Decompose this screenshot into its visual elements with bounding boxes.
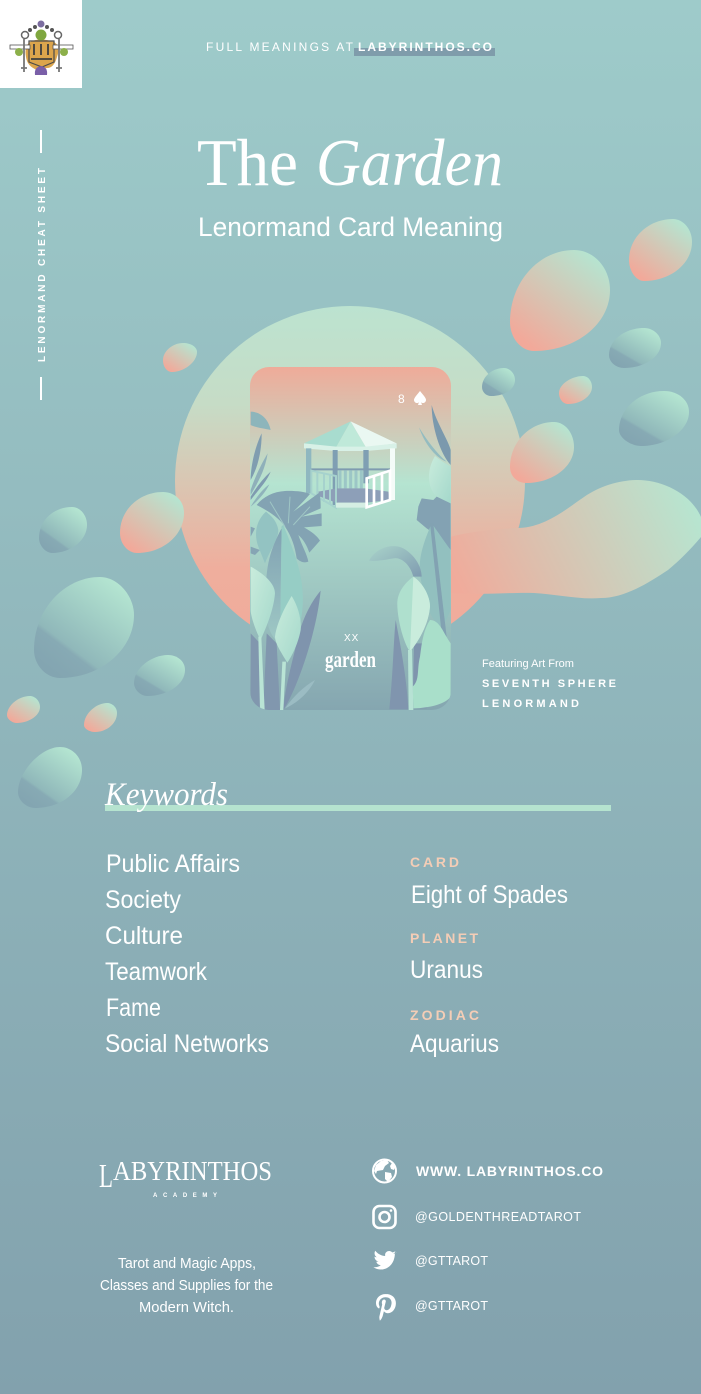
card name: garden <box>325 647 376 672</box>
title: Garden <box>316 126 503 200</box>
twitter handle: @GTTAROT <box>415 1254 488 1268</box>
card attributes: Aquarius <box>410 1030 499 1058</box>
icon: spade <box>414 391 426 405</box>
footer tagline: Tarot and Magic Apps, <box>118 1256 256 1272</box>
art credit: LENORMAND <box>482 698 579 710</box>
icon: foliage right <box>369 405 451 710</box>
top link: FULL MEANINGS AT <box>206 40 354 54</box>
keywords heading: Keywords <box>104 777 228 813</box>
floating blobs <box>7 219 692 808</box>
website: WWW. LABYRINTHOS.CO <box>416 1163 603 1179</box>
keyword list: Culture <box>105 922 183 950</box>
footer tagline: Classes and Supplies for the <box>100 1278 273 1294</box>
keyword list: Fame <box>106 994 161 1022</box>
card number: 8 <box>398 392 405 406</box>
vertical side label: LENORMAND CHEAT SHEET <box>37 168 48 362</box>
title: The <box>197 126 298 200</box>
footer tagline <box>100 1256 273 1316</box>
card attributes: PLANET <box>410 930 478 946</box>
footer logo: ABYRINTHOS <box>113 1156 272 1186</box>
card attributes: CARD <box>410 854 459 870</box>
card attributes: Eight of Spades <box>411 881 568 909</box>
pinterest handle: @GTTAROT <box>415 1299 488 1313</box>
keyword list: Teamwork <box>105 958 207 986</box>
title <box>197 126 503 200</box>
top link: LABYRINTHOS.CO <box>358 40 492 54</box>
icon: instagram <box>374 1206 396 1228</box>
footer tagline: Modern Witch. <box>139 1300 234 1316</box>
keyword list: Society <box>105 886 181 914</box>
card numeral: XX <box>344 633 359 644</box>
large circle with flowing tail <box>175 306 701 656</box>
subtitle: Lenormand Card Meaning <box>198 212 503 242</box>
icon: twitter <box>373 1251 397 1269</box>
art credit: Featuring Art From <box>482 658 574 670</box>
keyword list <box>105 850 269 1058</box>
footer logo: ACADEMY <box>153 1193 217 1199</box>
icon: gazebo <box>304 421 397 508</box>
illustration artwork <box>251 405 451 710</box>
icon: globe <box>373 1160 396 1182</box>
tarot card <box>250 367 451 710</box>
card attributes: Uranus <box>410 956 483 984</box>
card attributes <box>410 854 568 1058</box>
footer logo <box>99 1156 272 1199</box>
keyword list: Social Networks <box>105 1030 269 1058</box>
instagram handle: @GOLDENTHREADTAROT <box>415 1210 581 1224</box>
icon: foliage left <box>251 412 322 710</box>
footer logo: L <box>99 1158 113 1195</box>
card attributes: ZODIAC <box>410 1007 479 1023</box>
art credit <box>482 658 616 710</box>
logo badge <box>0 0 82 88</box>
art credit: SEVENTH SPHERE <box>482 678 616 690</box>
keywords heading <box>104 777 611 813</box>
keyword list: Public Affairs <box>106 850 240 878</box>
top link <box>206 40 495 56</box>
icon: pinterest <box>376 1294 396 1321</box>
